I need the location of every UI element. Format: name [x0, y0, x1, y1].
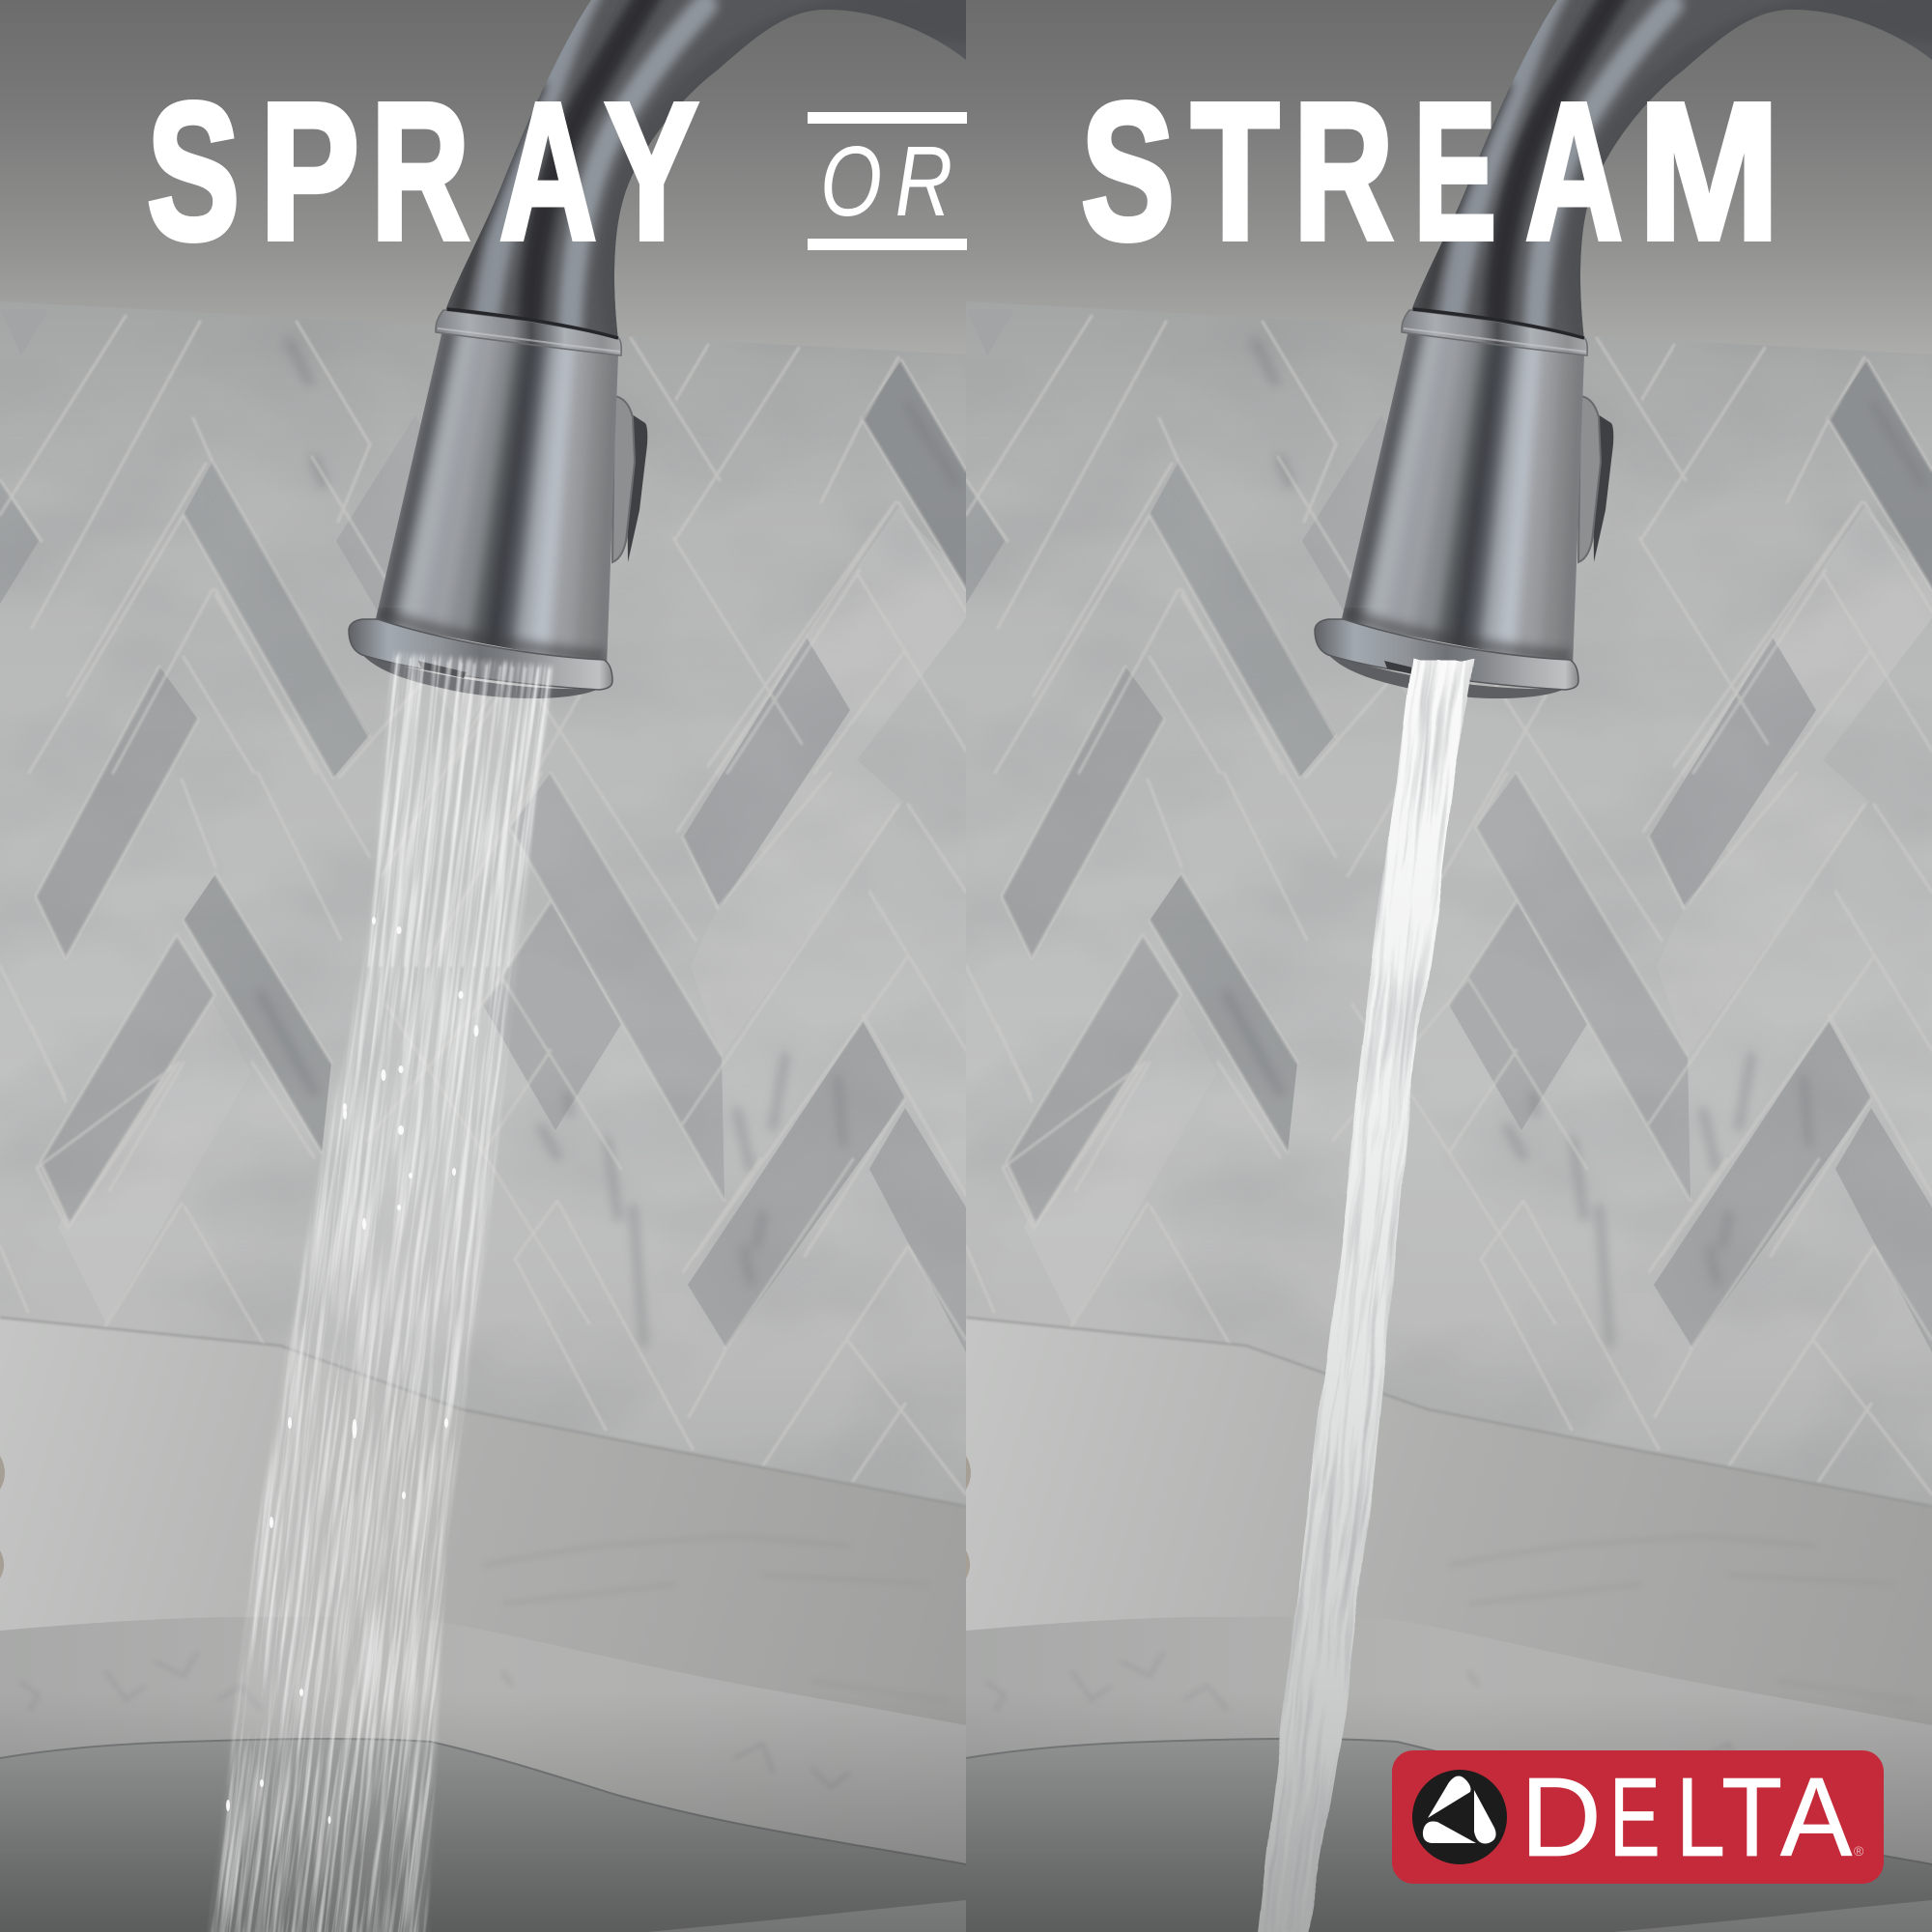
panel: stream [966, 0, 1932, 1932]
background: kitchen backsplash, cabinet and counter [0, 0, 966, 1932]
water: stream pattern [1258, 659, 1474, 1932]
title: STREAM: M [1638, 64, 1779, 281]
panel: spray [0, 0, 976, 1932]
title: STREAM: E [1413, 62, 1496, 280]
background: kitchen backsplash, cabinet and counter [966, 0, 1932, 1932]
title: SPRAY: P [260, 63, 359, 281]
title: STREAM: S [1081, 64, 1175, 281]
wordmark: DELTA: D [1520, 1754, 1602, 1880]
icon: Delta triangle mark [1412, 1770, 1507, 1864]
faucet [1315, 0, 1932, 698]
wordmark: DELTA [1520, 1754, 1852, 1881]
wordmark: DELTA: L [1676, 1755, 1725, 1881]
faucet [349, 0, 976, 698]
title: STREAM: R [1293, 63, 1394, 281]
title: SPRAY: A [499, 62, 597, 280]
logo: Delta badge [1392, 1750, 1884, 1884]
title: SPRAY: R [371, 62, 469, 280]
logo: Delta badge: ® [1854, 1843, 1864, 1859]
title: STREAM [1081, 62, 1779, 281]
wordmark: DELTA: A [1780, 1755, 1852, 1881]
wordmark: DELTA: T [1721, 1755, 1782, 1880]
title: STREAM: T [1191, 62, 1279, 280]
connector: OR between rules: OR [820, 126, 952, 237]
title: SPRAY: S [147, 63, 240, 281]
water: spray pattern [209, 651, 554, 1932]
title: SPRAY [147, 62, 698, 281]
wordmark: DELTA: E [1609, 1755, 1661, 1881]
title: STREAM: A [1525, 62, 1623, 280]
connector: OR between rules [808, 112, 967, 250]
title: SPRAY: Y [605, 64, 698, 281]
